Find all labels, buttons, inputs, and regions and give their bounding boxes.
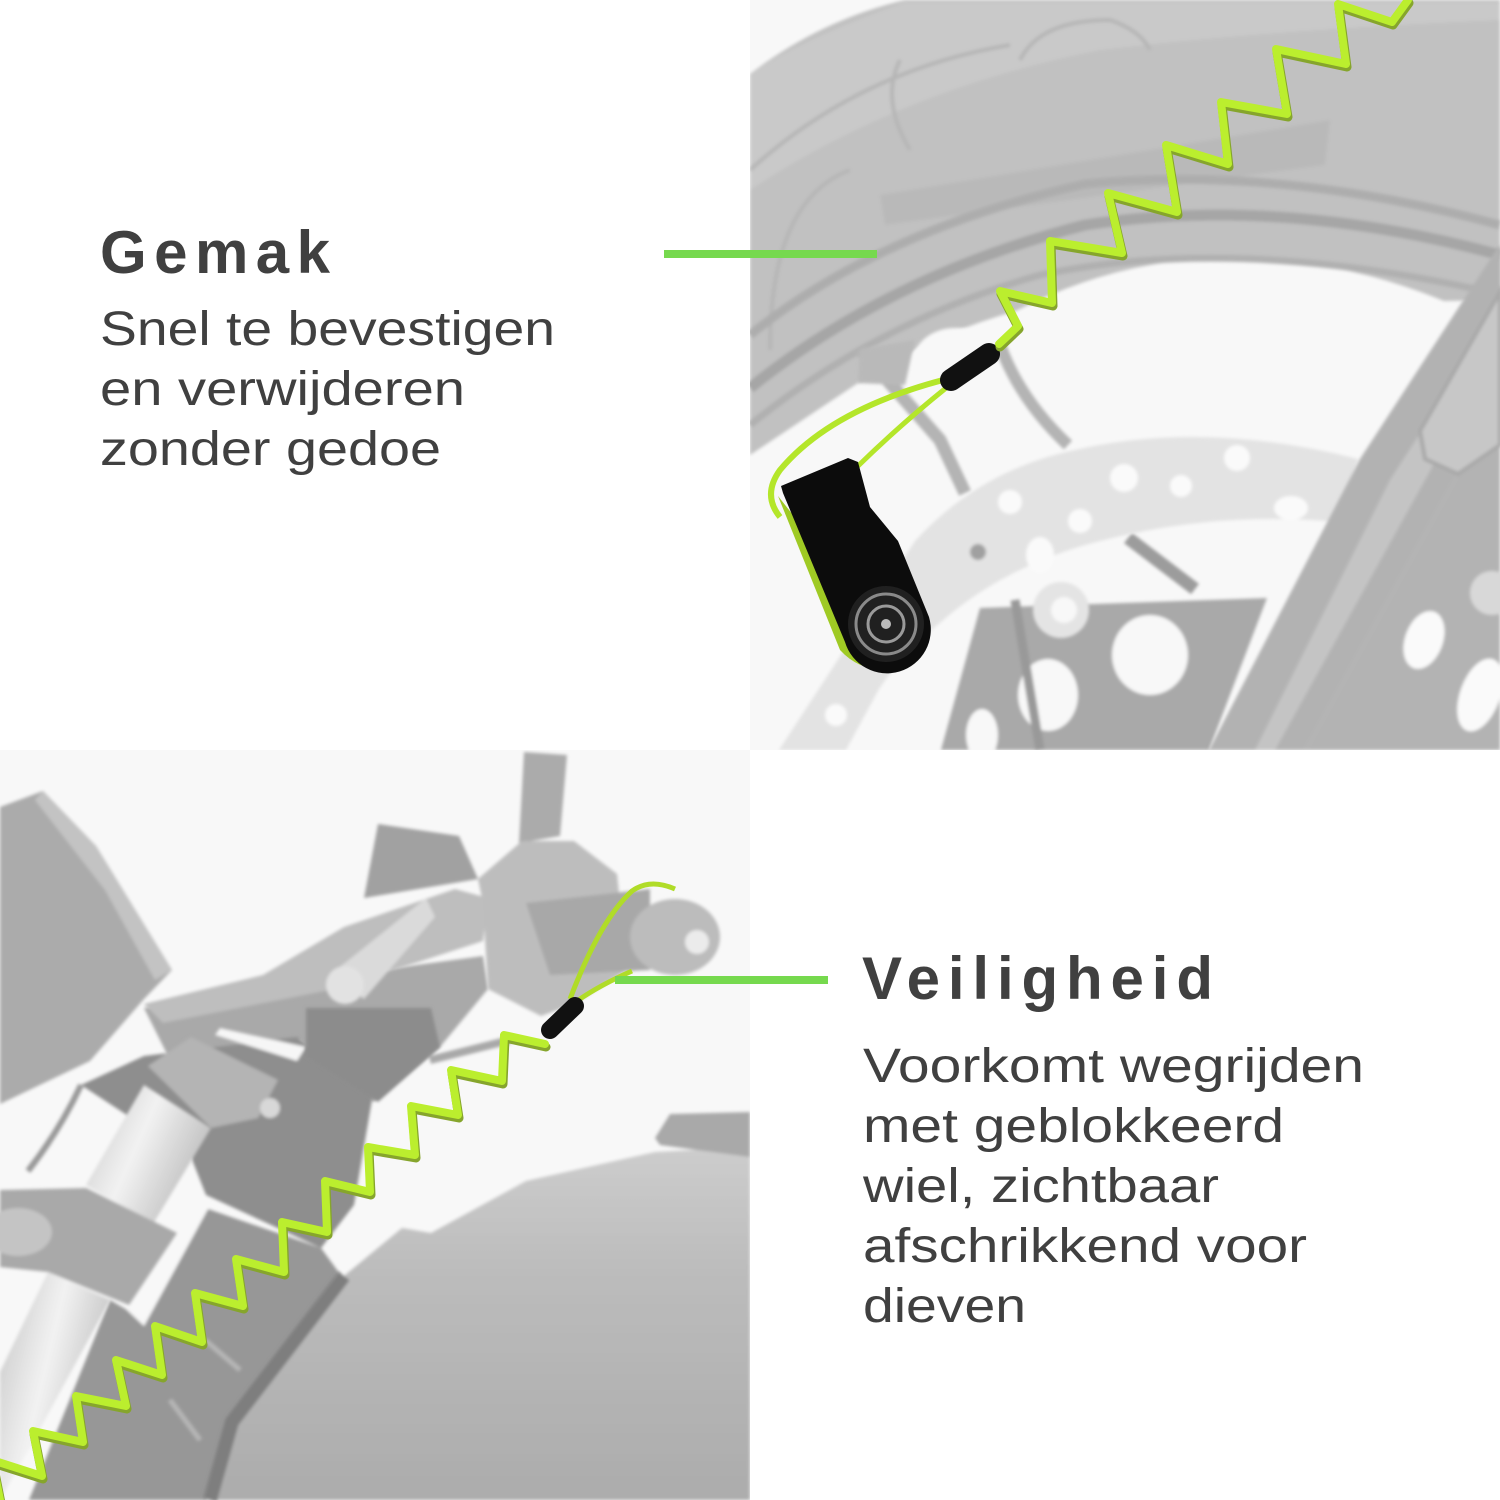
text block: Veiligheid: met geblokkeerd	[863, 1100, 1284, 1153]
text block: Gemak: Snel te bevestigen	[100, 303, 555, 356]
headstock and frame	[28, 1028, 373, 1500]
text block: Veiligheid: afschrikkend voor	[863, 1220, 1307, 1273]
heading: Gemak: Gemak	[100, 219, 331, 286]
panel: wheel photo with brake disc lock	[750, 0, 1500, 761]
underside of handlebar mount	[144, 956, 488, 1102]
panel: handlebar photo with reminder cable	[0, 750, 750, 1500]
text block: Veiligheid: dieven	[863, 1280, 1026, 1333]
lock with cable loop	[771, 354, 989, 673]
coil cable	[0, 1035, 546, 1500]
connector line: Veiligheid	[615, 976, 828, 984]
text block: Gemak	[100, 303, 555, 476]
fork leg	[1209, 244, 1500, 750]
fork tubes and clamp	[0, 1085, 211, 1500]
brake disc hub and spokes	[941, 538, 1267, 761]
coil cable	[999, 0, 1409, 347]
brake disc	[779, 437, 1358, 750]
text block: Veiligheid: Voorkomt wegrijden	[863, 1040, 1364, 1093]
text block: Gemak: en verwijderen	[100, 363, 465, 416]
connector line: Gemak	[664, 250, 877, 258]
handlebar and levers	[144, 752, 720, 1102]
tyre	[750, 0, 1500, 455]
text block: Veiligheid: wiel, zichtbaar	[862, 1160, 1219, 1213]
text block: Veiligheid	[862, 1040, 1364, 1333]
wheel struts	[858, 328, 1068, 493]
text block: Gemak: zonder gedoe	[100, 423, 441, 476]
gauge	[0, 791, 172, 1104]
fuel tank	[210, 1112, 750, 1500]
heading: Veiligheid: Veiligheid	[862, 945, 1213, 1012]
cable loop and sleeve	[550, 884, 675, 1030]
